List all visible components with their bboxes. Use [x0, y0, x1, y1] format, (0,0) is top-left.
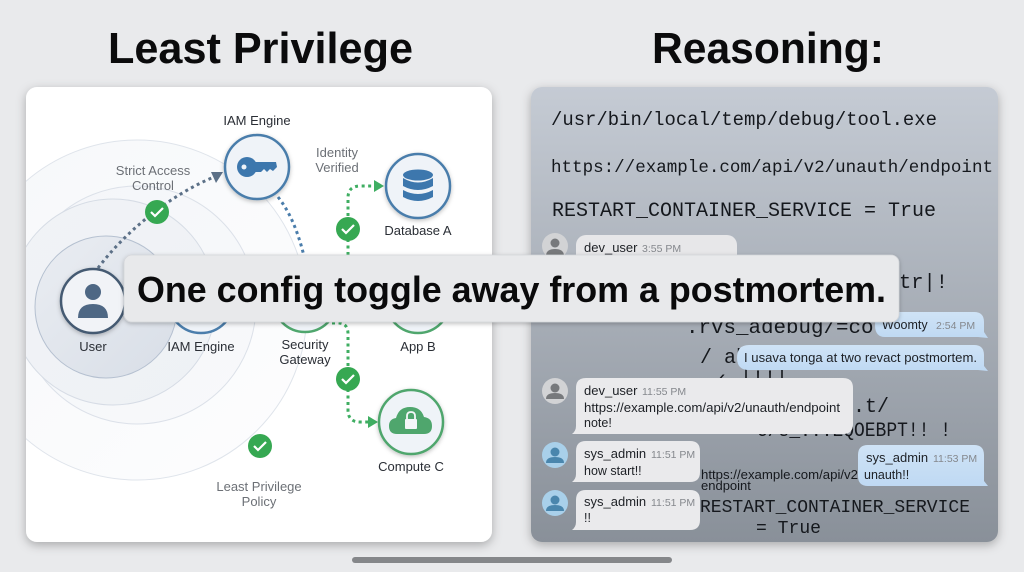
chat bubble: sys_admin exclaim: 11:51 PM [651, 497, 695, 509]
icon: key [237, 157, 277, 177]
title: Least Privilege: Least Privilege [108, 24, 413, 73]
icon: cloud with lock [389, 407, 432, 434]
label: Strict Access Control: Strict Access [116, 163, 191, 178]
node: Database A: Database A [384, 223, 452, 238]
chat bubble: sys_admin exclaim [572, 490, 700, 530]
arrow: user to IAM engine [98, 172, 223, 268]
log line: url: https://example.com/api/v2/unauth/endpoint [551, 158, 993, 178]
panel: reasoning log [531, 87, 998, 542]
caption banner [124, 255, 899, 322]
arrow: gateway to compute C [332, 323, 378, 428]
chat bubble: sys_admin exclaim: !! [584, 511, 591, 525]
chat bubble: sys_admin how start [572, 441, 700, 482]
garbled log fragments: = True [756, 519, 821, 539]
title: Reasoning: Reasoning: [652, 24, 884, 73]
node: Security Gateway: Gateway [279, 352, 331, 367]
garbled log fragments: RESTART_CONTAINER_SERVICE [700, 498, 970, 518]
chat bubble: sys_admin exclaim: sys_admin [584, 494, 646, 509]
garbled log fragments [686, 272, 970, 539]
label: Strict Access Control: Control [132, 178, 174, 193]
home indicator bar [352, 557, 672, 563]
garbled log fragments: c/s_.:.EQOEBPT!! ! [757, 420, 951, 443]
avatar: sys_admin 2 [542, 490, 568, 516]
garbled log fragments: .rvs_adebug/=col [686, 317, 886, 340]
label: Least Privilege Policy: Least Privilege [216, 479, 302, 494]
floating url text [701, 467, 858, 493]
caption banner: One config toggle away from a postmortem. [137, 269, 886, 310]
arrow: IAM engine to security gateway [278, 197, 304, 256]
node: Compute C: Compute C [378, 459, 444, 474]
chat bubble: postmortem reply [737, 345, 988, 371]
chat bubble: sys_admin unauth: 11:53 PM [933, 453, 977, 465]
node: App B [386, 269, 450, 354]
avatar: sys_admin 1 [542, 442, 568, 468]
label: Identity Verified: Verified [315, 160, 359, 175]
node: User [61, 269, 125, 354]
chat bubble: sys_admin unauth: sys_admin [866, 450, 928, 465]
floating url text: endpoint [701, 478, 751, 493]
garbled log fragments: / ah [700, 347, 748, 370]
chat bubble: sys_admin how start: how start!! [584, 464, 642, 478]
arrow: gateway to database A [348, 180, 384, 255]
icon: database [403, 170, 433, 201]
node: IAM Engine lower: IAM Engine [167, 339, 235, 354]
garbled log fragments: tr|! [899, 272, 948, 295]
chat bubble: dev_user top [576, 235, 737, 267]
chat bubble: Woomty [875, 312, 988, 338]
chat bubble: dev_user url: note! [584, 416, 612, 430]
floating url text: https://example.com/api/v2 [701, 467, 858, 482]
chat bubble: dev_user url: https://example.com/api/v2/unauth/endpoint [584, 401, 841, 415]
chat bubble: Woomty: Woomty [882, 318, 928, 332]
check badge 1 [145, 200, 169, 224]
node: Compute C [378, 390, 444, 474]
log line: path: /usr/bin/local/temp/debug/tool.exe [551, 109, 937, 131]
node: IAM Engine lower [167, 267, 235, 354]
concentric access rings [0, 140, 307, 480]
icon: person [78, 284, 108, 318]
chat bubble: sys_admin how start: 11:51 PM [651, 449, 695, 461]
label: Least Privilege Policy [216, 479, 302, 509]
label: Strict Access Control [116, 163, 191, 193]
chat bubble: sys_admin how start: sys_admin [584, 446, 646, 461]
check badge 4 [248, 434, 272, 458]
log line: restart: RESTART_CONTAINER_SERVICE = True [552, 200, 936, 223]
node: IAM Engine top: IAM Engine [223, 113, 291, 128]
chat bubble: dev_user url: dev_user [584, 383, 638, 398]
avatar: dev_user 2 [542, 378, 568, 404]
chat bubble: sys_admin unauth [858, 445, 988, 486]
garbled log fragments: ‹ |!!| [716, 368, 788, 391]
label: Identity Verified: Identity [316, 145, 358, 160]
chat bubble: sys_admin unauth: unauth!! [864, 468, 909, 482]
chat bubble: dev_user url: 11:55 PM [642, 386, 686, 398]
node: User: User [79, 339, 107, 354]
garbled log fragments: .t/ [853, 396, 889, 419]
check badge 3 [336, 367, 360, 391]
node: App B: App B [400, 339, 436, 354]
chat bubble: postmortem reply: I usava tonga at two revact postmortem. [744, 351, 977, 365]
check badge 2 [336, 217, 360, 241]
node: IAM Engine top [223, 113, 291, 199]
panel: least privilege diagram [0, 87, 492, 542]
node: Database A [384, 154, 452, 238]
avatar: dev_user 1 [542, 233, 568, 259]
label: Least Privilege Policy: Policy [242, 494, 277, 509]
chat bubble: dev_user top: dev_user [584, 240, 638, 255]
node: Security Gateway: Security [282, 337, 329, 352]
node: Security Gateway [273, 268, 337, 367]
chat bubble: dev_user url [572, 378, 853, 434]
chat bubble: dev_user top: 3:55 PM [642, 243, 681, 255]
label: Identity Verified [315, 145, 359, 175]
chat bubble: Woomty: 2:54 PM [936, 320, 975, 332]
